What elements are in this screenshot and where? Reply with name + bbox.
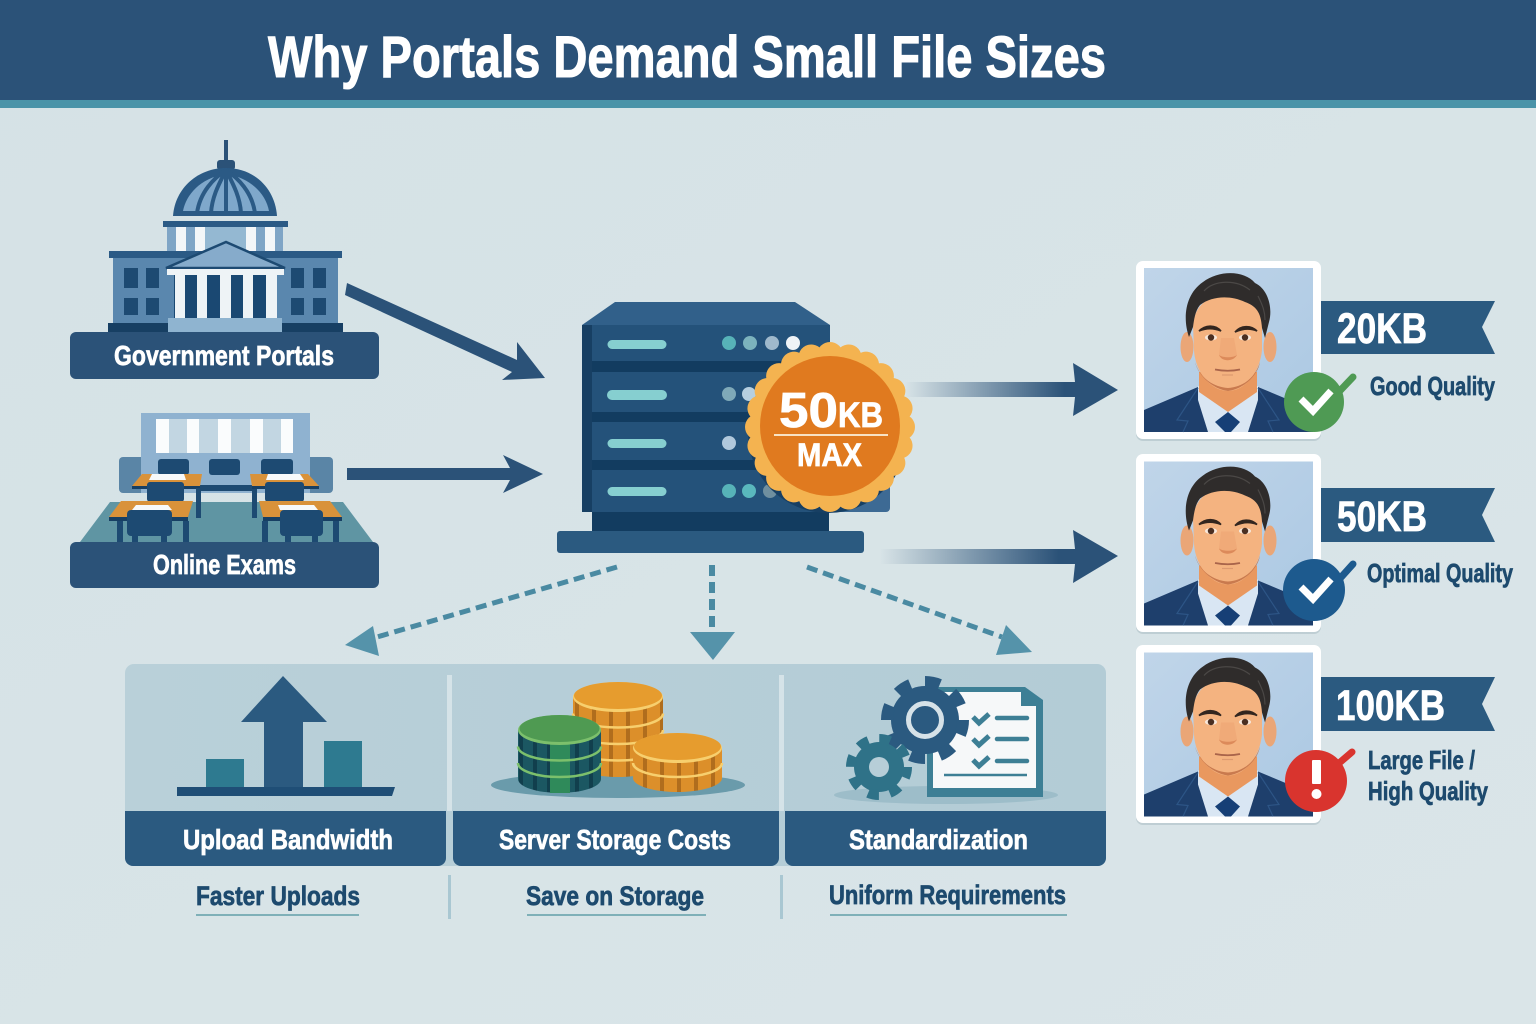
- header: Upload Bandwidth: [125, 811, 446, 866]
- label: Government Portals: Government Portals: [114, 340, 334, 371]
- caption: Faster Uploads: Faster Uploads: [196, 881, 360, 911]
- panel: 50KB example: [1136, 454, 1513, 634]
- label: Large File / High Quality: [1368, 745, 1488, 806]
- caption: Uniform Requirements: Uniform Requirements: [829, 880, 1066, 910]
- label: Large File / High Quality: High Quality: [1368, 776, 1488, 806]
- header: Upload Bandwidth: Upload Bandwidth: [183, 824, 393, 855]
- photo card: [1136, 261, 1321, 441]
- title: Why Portals Demand Small File Sizes: [268, 25, 1106, 90]
- dashed arrow: to server storage costs: [690, 565, 735, 660]
- ribbon: 20KB: [1321, 301, 1495, 354]
- arrow: government portals to server: [345, 283, 545, 380]
- label: Government Portals: [70, 332, 379, 379]
- header: Standardization: Standardization: [849, 824, 1028, 855]
- badge: 50KB max: [745, 342, 915, 513]
- caption: Save on Storage: Save on Storage: [526, 881, 704, 911]
- photo card: [1136, 454, 1321, 634]
- label: Good Quality: Good Quality: [1370, 371, 1495, 401]
- icon: red warning: [1285, 750, 1352, 812]
- label: Online Exams: Online Exams: [153, 549, 296, 580]
- panel: 20KB example: [1136, 261, 1495, 441]
- header: Standardization: [785, 811, 1106, 866]
- icon: online exam classroom: [80, 413, 373, 542]
- ribbon: 100KB: 100KB: [1336, 682, 1445, 730]
- label: Large File / High Quality: Large File /: [1368, 745, 1475, 775]
- label: Online Exams: [70, 542, 379, 588]
- arrow: server to 50KB photo: [880, 530, 1118, 583]
- header: Server Storage Costs: Server Storage Costs: [499, 824, 731, 855]
- arrow: online exams to server: [347, 455, 543, 493]
- badge: 50KB max: 50: [779, 384, 838, 438]
- icon: server stack: [557, 302, 890, 553]
- icon: upload bandwidth: [177, 676, 395, 796]
- dashed arrow: to upload bandwidth: [345, 567, 617, 656]
- ribbon: 50KB: 50KB: [1337, 493, 1427, 541]
- panel: 100KB example: [1136, 645, 1495, 825]
- title banner: [0, 0, 1536, 108]
- header: Server Storage Costs: [453, 811, 779, 866]
- panel: reasons: [125, 664, 1106, 919]
- ribbon: 100KB: [1321, 677, 1495, 731]
- ribbon: 50KB: [1321, 488, 1495, 542]
- arrow: server to 20KB photo: [905, 363, 1118, 416]
- photo card: [1136, 645, 1321, 825]
- badge: 50KB max: MAX: [797, 437, 863, 473]
- dashed arrow: to standardization: [807, 567, 1032, 655]
- icon: gears and checklist: [834, 682, 1058, 804]
- badge: 50KB max: KB: [838, 396, 883, 435]
- icon: blue check: [1283, 559, 1353, 621]
- icon: government building: [108, 140, 343, 332]
- icon: green check: [1284, 372, 1353, 432]
- ribbon: 20KB: 20KB: [1337, 305, 1427, 353]
- icon: coin stacks: [491, 682, 745, 798]
